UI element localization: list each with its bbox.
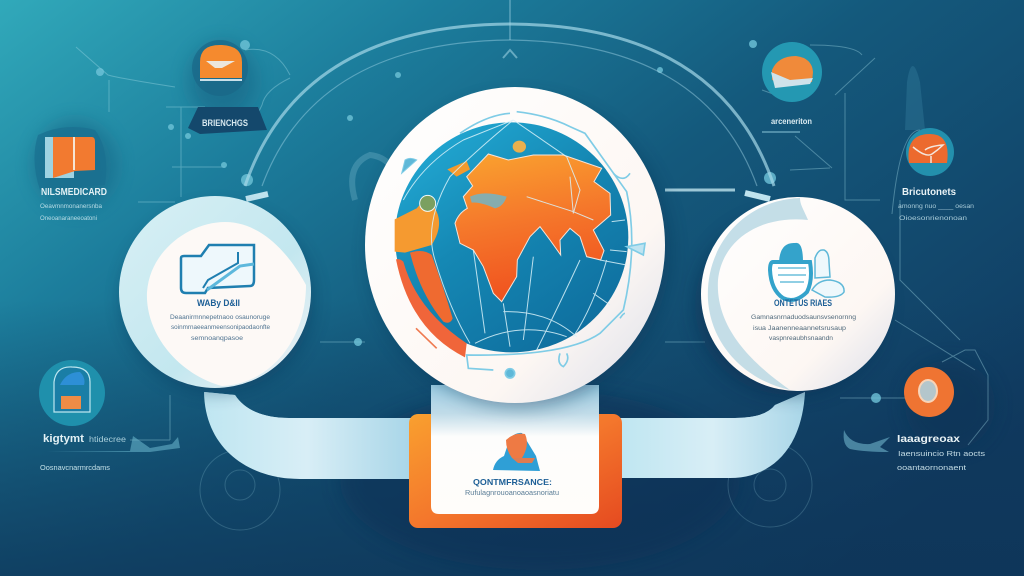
item title: kigtymt xyxy=(43,433,84,445)
item text xyxy=(897,449,985,472)
icon circle xyxy=(39,360,105,426)
faint droplet xyxy=(905,66,925,130)
icon: orange book xyxy=(45,137,95,178)
left circle title: WABy D&II xyxy=(197,298,240,308)
icon: orange medallion xyxy=(904,367,954,417)
panel: top-left item xyxy=(188,40,267,134)
panel: lower-right item xyxy=(844,367,985,472)
green spot xyxy=(420,195,436,211)
map graticule xyxy=(403,120,627,350)
icon: orange dome xyxy=(908,134,948,163)
item text: amonng nuo ____ oesan xyxy=(898,204,974,210)
panel: central globe xyxy=(365,87,670,407)
item text: Oosnavcnarmrcdams xyxy=(40,463,110,472)
icon stripe xyxy=(200,61,242,81)
globe white disc xyxy=(365,87,665,403)
left circle text: Deaanirmnnepetnaoo osaunoruge xyxy=(170,314,270,321)
orange backing card xyxy=(409,414,622,528)
panel: left circle xyxy=(119,196,313,392)
south america xyxy=(410,251,453,323)
icon: orange dome xyxy=(200,45,242,78)
panel: top-right item xyxy=(762,42,822,132)
fish tail xyxy=(844,430,890,452)
label tag xyxy=(188,107,267,134)
left circle text: soinmrnaeeanmeensonipaodaonfte xyxy=(171,324,270,331)
icon: folder xyxy=(181,245,254,293)
large top arc xyxy=(245,0,774,199)
right circle text xyxy=(751,314,856,342)
item label: arceneriton xyxy=(771,117,812,126)
item title: Bricutonets xyxy=(902,187,956,198)
ocean xyxy=(395,122,628,352)
pedestal card behind and below globe xyxy=(409,385,622,528)
network nodes xyxy=(96,40,881,403)
panel: lower-left item xyxy=(39,360,180,472)
left circle text xyxy=(170,314,270,342)
small land xyxy=(447,161,470,177)
left circle shadow xyxy=(123,208,313,392)
icon: mask and bottle xyxy=(770,243,844,300)
right circle body xyxy=(701,197,895,391)
right circle text: Gamnasnrnaduodsaunsvsenornng xyxy=(751,314,856,321)
item underline xyxy=(762,131,800,133)
globe map xyxy=(395,112,645,378)
item title: htidecree xyxy=(89,435,127,444)
item text: Oioesonrienonoan xyxy=(899,216,967,222)
mediterranean xyxy=(470,193,507,208)
icon: dome stand xyxy=(493,433,540,471)
icon halo xyxy=(34,127,106,190)
left circle inner disc xyxy=(147,222,306,386)
icon: orange cap xyxy=(771,56,813,88)
white card xyxy=(431,385,599,514)
icon detail xyxy=(919,380,937,402)
red strip left xyxy=(396,259,467,357)
card title: QONTMFRSANCE: xyxy=(473,477,552,487)
globe pin xyxy=(513,141,526,153)
north america xyxy=(395,202,439,253)
right circle text: vaspnreaubhsnaandn xyxy=(769,335,833,342)
icon: backpack xyxy=(54,367,90,412)
panel: upper-left item xyxy=(34,127,107,222)
right circle shadow xyxy=(695,215,885,395)
item text xyxy=(40,204,103,222)
orange marks xyxy=(416,328,437,348)
item underline xyxy=(46,436,180,452)
item title: NILSMEDICARD xyxy=(41,187,107,198)
item text: Oneoanaraneeoatoni xyxy=(40,216,97,222)
icon circle xyxy=(762,42,822,102)
right circle title: ONTETUS RIAES xyxy=(774,298,832,308)
icon halo xyxy=(192,40,248,96)
panel: upper-right item xyxy=(898,66,974,222)
item title xyxy=(43,433,127,445)
item text: Oeavmnmonanersnba xyxy=(40,204,103,210)
afro-eurasia xyxy=(455,154,611,302)
globe disc shadow xyxy=(370,97,670,407)
panel: right circle xyxy=(695,197,895,395)
item title: Iaaagreoax xyxy=(897,434,961,445)
left circle text: semnoanqpasoe xyxy=(191,335,243,342)
right circle crescent xyxy=(708,198,808,390)
card subtitle: Rufulagnrouoanoaoasnoriatu xyxy=(465,490,559,497)
icon circle xyxy=(906,128,954,176)
item text: Iaensuincio Rtn aocts xyxy=(898,449,985,458)
icon mark xyxy=(913,145,943,163)
globe frame ring xyxy=(402,112,645,378)
right circle text: isua Jaanenneaannetsrusaup xyxy=(753,325,846,332)
connector band xyxy=(204,392,805,479)
label text: BRIENCHGS xyxy=(202,118,248,128)
left circle rim xyxy=(119,196,311,388)
item text xyxy=(898,204,974,222)
item text: ooantaornonaent xyxy=(897,463,967,472)
circuit network lines xyxy=(76,45,988,530)
